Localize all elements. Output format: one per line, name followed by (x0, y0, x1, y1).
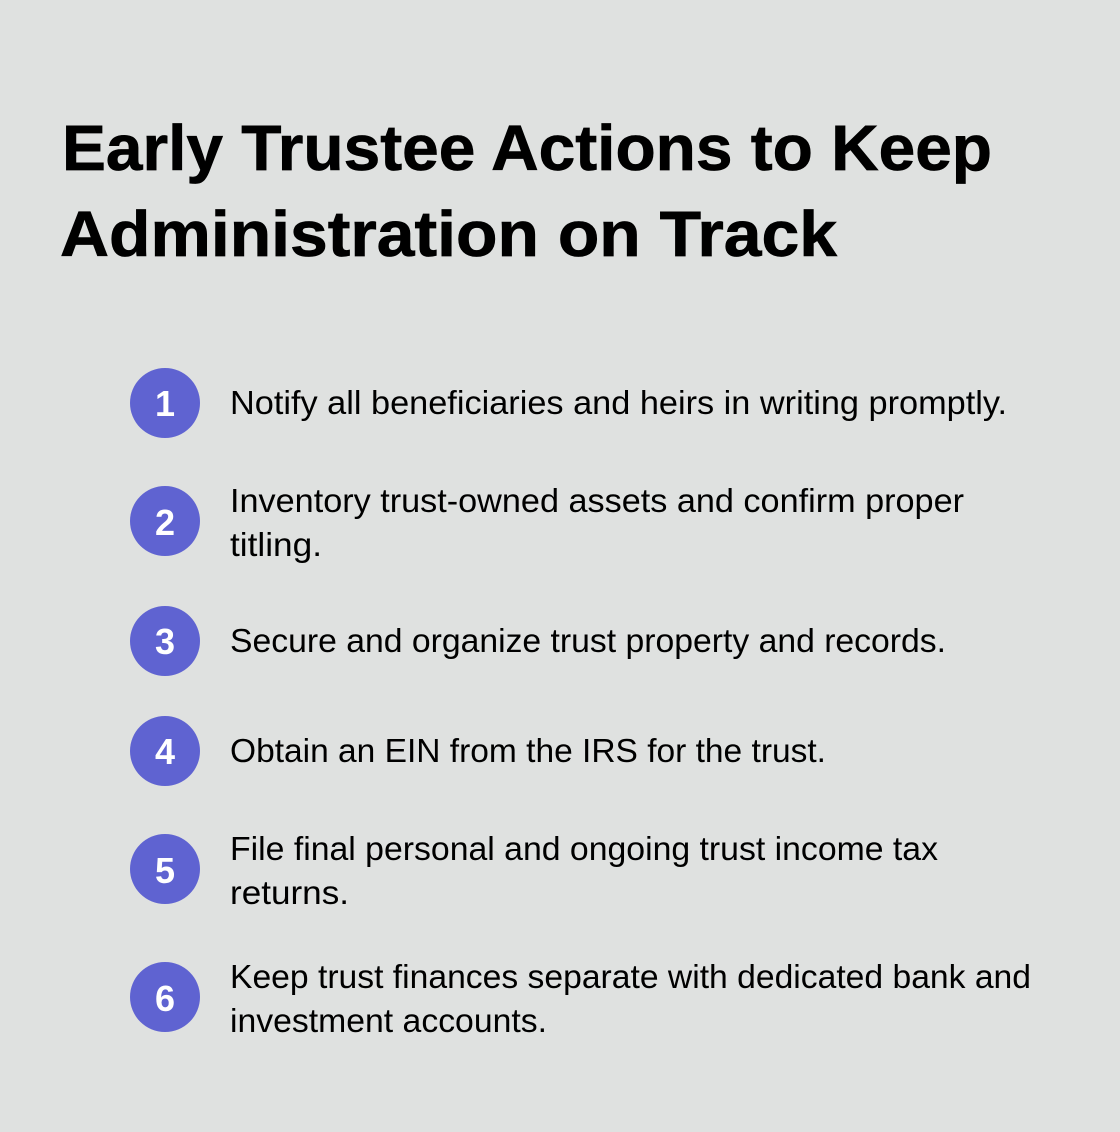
number badge 6 (130, 962, 200, 1032)
item 1 text: Notify all beneficiaries and heirs in writing promptly. (230, 384, 1007, 421)
item 6 text (230, 958, 1031, 1039)
item 3 text: Secure and organize trust property and records. (230, 622, 946, 659)
list item 3 (130, 606, 946, 676)
number badge 4 (130, 716, 200, 786)
title (60, 112, 992, 270)
item 5 text (230, 830, 938, 911)
number badge 5 (130, 834, 200, 904)
item 4 text: Obtain an EIN from the IRS for the trust. (230, 732, 826, 769)
list item 5 (130, 830, 938, 911)
item 2 text (230, 482, 964, 563)
title: Administration on Track (60, 198, 837, 270)
item 2 text: Inventory trust-owned assets and confirm proper (230, 482, 964, 519)
title: Early Trustee Actions to Keep (62, 112, 992, 184)
list item 2 (130, 482, 964, 563)
item 6 text: investment accounts. (230, 1002, 547, 1039)
number badge 1: 1 (155, 383, 175, 424)
list item 4 (130, 716, 826, 786)
number badge 2 (130, 486, 200, 556)
item 5 text: returns. (230, 874, 349, 911)
item 2 text: titling. (230, 526, 322, 563)
number badge 4: 4 (155, 731, 175, 772)
number badge 1 (130, 368, 200, 438)
number badge 3 (130, 606, 200, 676)
number badge 3: 3 (155, 621, 175, 662)
item 5 text: File final personal and ongoing trust income tax (230, 830, 938, 867)
number badge 5: 5 (155, 850, 175, 891)
item 6 text: Keep trust finances separate with dedicated bank and (230, 958, 1031, 995)
list item 1 (130, 368, 1007, 438)
number badge 6: 6 (155, 978, 175, 1019)
number badge 2: 2 (155, 502, 175, 543)
list item 6 (130, 958, 1031, 1039)
